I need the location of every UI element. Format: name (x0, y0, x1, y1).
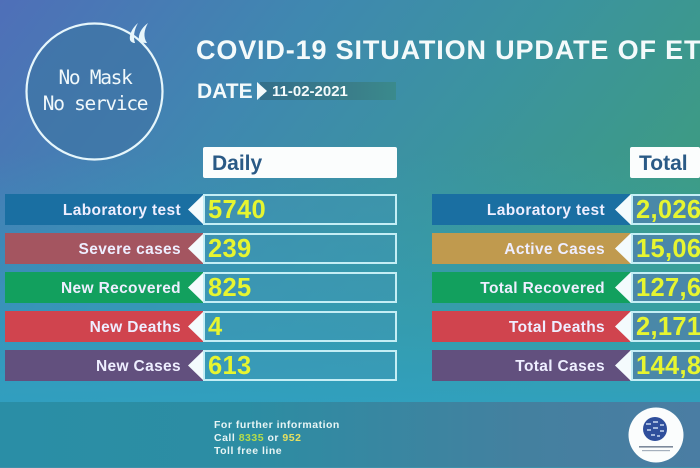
row: New Cases daily: 613 (208, 352, 251, 380)
row: Total Cases total: 144,8 (636, 352, 700, 380)
row: Laboratory test daily (5, 194, 397, 225)
heading: Total: Total (639, 152, 688, 175)
row: Total Cases total (432, 350, 700, 381)
row: Severe cases daily: 239 (208, 235, 251, 263)
footer contact text: Toll free line (214, 445, 282, 457)
footer band (0, 402, 700, 467)
badge: No Mask No service: No service (43, 92, 147, 115)
row: Active Cases total: Active Cases (504, 241, 605, 258)
date row: DATE (197, 80, 253, 103)
row: Total Deaths total: Total Deaths (509, 319, 605, 336)
footer contact text (214, 419, 340, 457)
row: Total Deaths total: 2,171 (636, 313, 700, 341)
row: New Recovered daily: New Recovered (61, 280, 181, 297)
badge: No Mask No service (25, 22, 164, 161)
row: Active Cases total (432, 233, 700, 264)
row: New Recovered daily (5, 272, 397, 303)
row: Severe cases daily (5, 233, 397, 264)
row: Active Cases total: 15,06 (636, 235, 700, 263)
badge: No Mask No service: No Mask (58, 66, 132, 89)
row: Total Recovered total (432, 272, 700, 303)
footer contact text: Call 8335 or 952 (214, 432, 301, 444)
row: New Recovered daily: 825 (208, 274, 251, 302)
row: Severe cases daily: Severe cases (79, 241, 181, 258)
row: New Deaths daily (5, 311, 397, 342)
row: Total Cases total: Total Cases (515, 358, 605, 375)
row: Total Recovered total: Total Recovered (480, 280, 605, 297)
date row (197, 80, 396, 103)
row: Laboratory test total (432, 194, 700, 225)
row: Total Recovered total: 127,6 (636, 274, 700, 302)
row: New Deaths daily: New Deaths (90, 319, 181, 336)
row: Laboratory test daily: Laboratory test (63, 202, 181, 219)
row: Laboratory test daily: 5740 (208, 196, 266, 224)
footer contact text: For further information (214, 419, 340, 431)
row: Total Deaths total (432, 311, 700, 342)
row: Laboratory test total: 2,026 (636, 196, 700, 224)
row: New Deaths daily: 4 (208, 313, 222, 341)
heading: Daily (203, 147, 397, 178)
heading: Total (630, 147, 700, 178)
heading: Daily: Daily (212, 152, 262, 175)
logo: ministry of health (628, 408, 684, 462)
row: New Cases daily (5, 350, 397, 381)
row: Laboratory test total: Laboratory test (487, 202, 605, 219)
date row: 11-02-2021 (272, 83, 348, 100)
row: New Cases daily: New Cases (96, 358, 181, 375)
